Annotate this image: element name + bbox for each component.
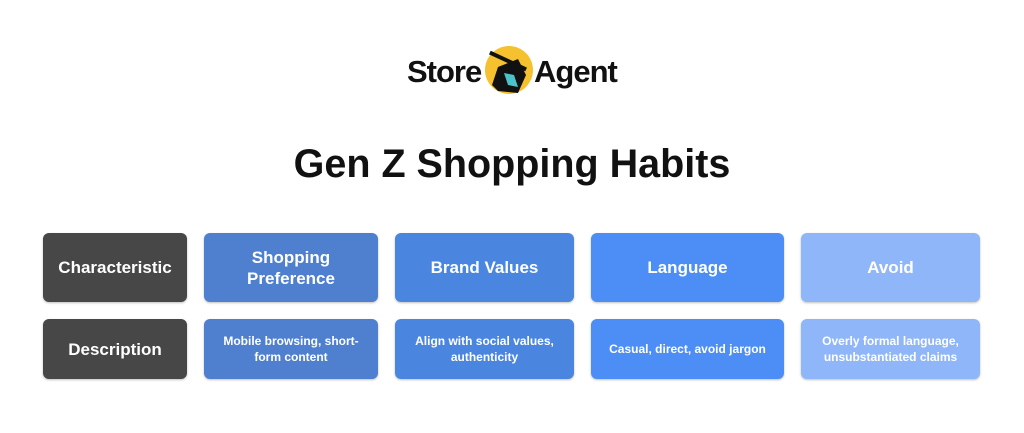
header: Brand Values — [395, 233, 574, 302]
header: Shopping Preference — [204, 233, 378, 302]
row header: Characteristic: Characteristic — [58, 258, 172, 277]
header: Brand Values: Brand Values — [431, 258, 538, 277]
logo text: Store: Store — [407, 54, 481, 89]
header: Avoid — [801, 233, 980, 302]
title: Gen Z Shopping Habits — [294, 142, 730, 186]
logo — [407, 46, 618, 94]
desc: avoid: Overly formal language, unsubstantiated claims — [822, 334, 959, 364]
desc: brand values — [395, 319, 574, 379]
desc: language — [591, 319, 784, 379]
desc: shopping preference: Mobile browsing, short-form content — [223, 334, 359, 364]
header: Shopping Preference: Preference — [247, 268, 335, 288]
desc: shopping preference — [204, 319, 378, 379]
desc: brand values: Align with social values, authenticity — [415, 334, 554, 364]
desc: language: Casual, direct, avoid jargon — [609, 342, 766, 356]
header: Shopping Preference: Shopping — [252, 248, 330, 266]
header: Avoid: Avoid — [867, 258, 914, 277]
logo text: Agent: Agent — [534, 54, 617, 89]
row header: Characteristic — [43, 233, 187, 302]
icon: agent — [485, 46, 533, 94]
header: Language: Language — [647, 258, 728, 277]
header: Language — [591, 233, 784, 302]
desc: avoid — [801, 319, 980, 379]
row header: Description — [43, 319, 187, 379]
row header: Description: Description — [68, 340, 162, 358]
